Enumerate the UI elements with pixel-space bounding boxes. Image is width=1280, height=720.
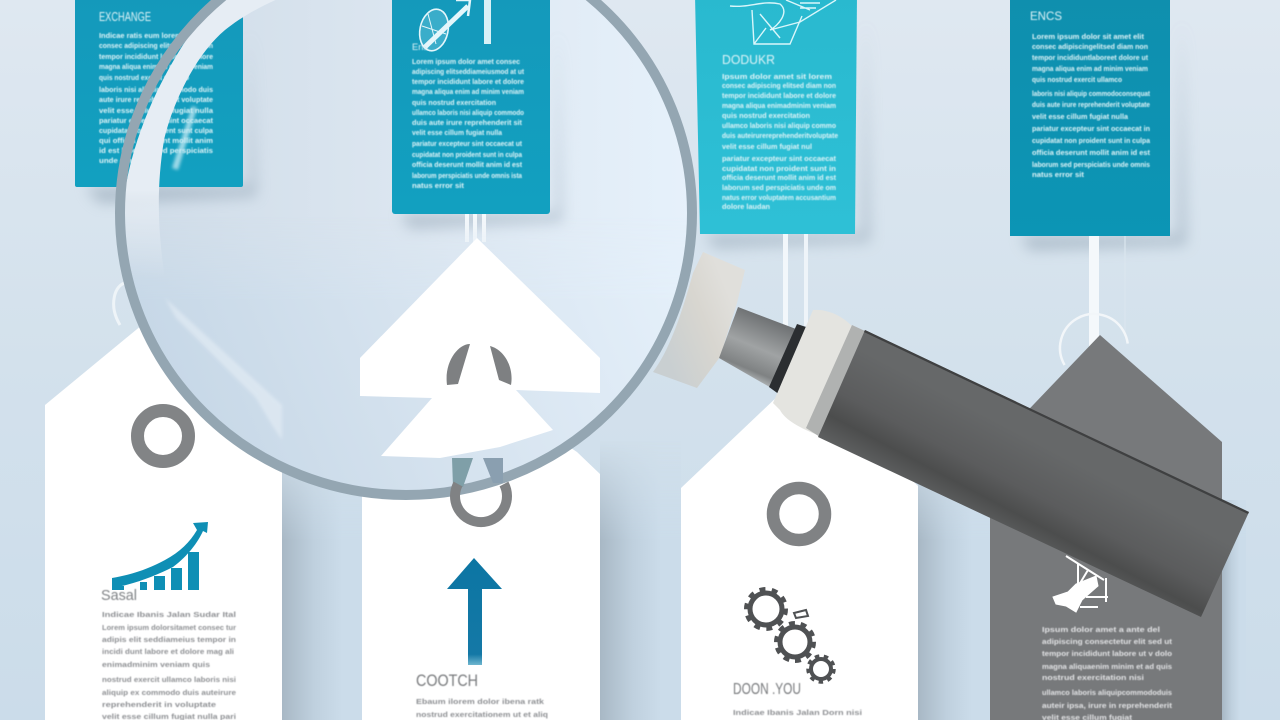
icon: growth chart bbox=[112, 522, 208, 590]
panel: card 2: Ens bbox=[412, 42, 429, 52]
panel: tag 4 bbox=[990, 302, 1222, 720]
panel: tag 4: auteir ipsa, irure in reprehenderit bbox=[1042, 701, 1173, 710]
panel: card 1: quis nostrud exercit ullamco bbox=[99, 73, 189, 82]
panel: card 3: dolore laudan bbox=[722, 202, 770, 211]
lower ring bbox=[455, 484, 507, 522]
panel: tag 1: reprehenderit in voluptate bbox=[102, 700, 216, 709]
panel: tag 4: magna aliquaenim minim et ad quis bbox=[1042, 662, 1172, 671]
tag 2 upper and folded shape bbox=[360, 238, 600, 458]
panel: tag 2 lower bbox=[362, 380, 600, 720]
panel: card 1: Indicae ratis eum lorem dolor sit bbox=[99, 31, 213, 40]
panel: card 3: velit esse cillum fugiat nul bbox=[722, 142, 812, 151]
panel: tag 1 bbox=[45, 283, 282, 720]
icon: up arrow bbox=[447, 558, 502, 665]
panel: tag 3: Indicae Ibanis Jalan Dorn nisi bbox=[733, 708, 862, 717]
panel: card 4: ENCS bbox=[1030, 9, 1062, 23]
panel: card 4: cupidatat non proident sunt in culpa bbox=[1032, 136, 1151, 145]
panel: card 3: consec adipiscing elitsed diam non bbox=[722, 81, 836, 90]
panel: card 4: consec adipiscingelitsed diam non bbox=[1032, 42, 1148, 51]
steel band bbox=[806, 325, 865, 437]
panel: card 3: laborum sed perspiciatis unde om bbox=[722, 183, 836, 192]
panel: tag 1: adipis elit seddiameius tempor in bbox=[102, 635, 236, 644]
panel: tag 1: Sasal bbox=[101, 587, 137, 604]
ring arcs bbox=[447, 344, 512, 385]
icon: ring bbox=[138, 410, 188, 462]
panel: card 3: ullamco laboris nisi aliquip commo bbox=[722, 121, 836, 130]
panel: tag 1: Lorem ipsum dolorsitamet consec tur bbox=[102, 623, 236, 632]
panel: card 3: magna aliqua enimadminim veniam bbox=[722, 101, 836, 110]
icon: white machine sketch bbox=[1053, 556, 1108, 612]
panel: card 2: laborum perspiciatis unde omnis ista bbox=[412, 171, 523, 180]
panel: card 4: officia deserunt mollit anim id est bbox=[1032, 148, 1150, 157]
panel: card 1 bbox=[75, 0, 256, 203]
panel: card 4: laborum sed perspiciatis unde omnis bbox=[1032, 160, 1150, 169]
panel: tag 1: aliquip ex commodo duis auteirure bbox=[102, 688, 236, 697]
panel: card 3: DODUKR bbox=[722, 52, 775, 67]
panel: card 2: natus error sit bbox=[412, 181, 465, 190]
panel: card 2: quis nostrud exercitation bbox=[412, 98, 496, 107]
icon: ring bbox=[773, 488, 825, 540]
lens streak bbox=[172, 106, 197, 170]
panel: card 1: pariatur excepteur sint occaecat bbox=[99, 116, 213, 125]
panel: card 1: id est laborum sed perspiciatis bbox=[99, 146, 213, 155]
panel: card 1: laboris nisi aliquip commodo duis bbox=[99, 85, 213, 94]
panel: card 3: pariatur excepteur sint occaecat bbox=[722, 154, 836, 163]
lens glass back bbox=[120, 0, 692, 495]
panel: card 4 bbox=[1010, 0, 1186, 250]
panel: card 1: qui officia deserunt mollit anim bbox=[99, 136, 213, 145]
icon: magnifying handle bbox=[653, 252, 1249, 617]
grip bbox=[818, 330, 1249, 617]
lens reflection of tag 1 bbox=[165, 298, 282, 440]
panel: card 2 bbox=[392, 0, 562, 230]
icon: globe and arrow bbox=[416, 0, 491, 53]
panel: tag 4: nostrud exercitation nisi bbox=[1042, 673, 1144, 682]
panel: card 4: natus error sit bbox=[1032, 170, 1085, 179]
panel: card 4: laboris nisi aliquip commodoconsequat bbox=[1032, 89, 1150, 98]
panel: card 2: officia deserunt mollit anim id est bbox=[412, 160, 522, 169]
tag 2 seen through lens bbox=[360, 238, 600, 522]
panel: card 3: natus error voluptatem accusantium bbox=[722, 193, 836, 202]
panel: tag 3 bbox=[681, 375, 918, 720]
panel: card 2: magna aliqua enim ad minim veniam bbox=[412, 87, 524, 96]
panel: card 1: cupidatat non proident sunt culpa bbox=[99, 126, 214, 135]
panel: card 4: quis nostrud exercit ullamco bbox=[1032, 75, 1122, 84]
panel: card 2: duis aute irure reprehenderit sit bbox=[412, 118, 522, 127]
panel: card 1: tempor incididunt labore et dolore bbox=[99, 52, 213, 61]
panel: card 3: duis auteirurereprehenderitvoluptate bbox=[722, 131, 838, 140]
panel: card 2: ullamco laboris nisi aliquip commodo bbox=[412, 108, 524, 117]
icon: mechanical sketch bbox=[730, 0, 836, 44]
panel: card 4: Lorem ipsum dolor sit amet elit bbox=[1032, 32, 1144, 41]
panel: card 2: Lorem ipsum dolor amet consec bbox=[412, 57, 520, 66]
lens rim bbox=[120, 0, 692, 495]
panel: card 3: officia deserunt mollit anim id est bbox=[722, 173, 836, 182]
panel: tag 2 lower: Ebaum ilorem dolor ibena ratk bbox=[416, 697, 545, 706]
white collar bbox=[773, 310, 852, 436]
panel: card 1: magna aliqua enim ad minim veniam bbox=[99, 62, 213, 71]
panel: card 1: aute irure reprehenderit voluptate bbox=[99, 95, 213, 104]
panel: tag 4: tempor incididunt labore ut v dolo bbox=[1042, 649, 1172, 658]
panel: card 2: pariatur excepteur sint occaecat ut bbox=[412, 139, 522, 148]
panel: card 4: magna aliqua enim ad minim veniam bbox=[1032, 64, 1148, 73]
panel: card 2: adipiscing elitseddiameiusmod at ut bbox=[412, 67, 524, 76]
steel rod bbox=[719, 307, 796, 389]
panel: card 3: quis nostrud exercitation bbox=[722, 111, 810, 120]
panel: tag 1: enimadminim veniam quis bbox=[102, 660, 210, 669]
panel: tag 2 lower: nostrud exercitationem ut et aliq bbox=[416, 710, 548, 719]
shadows beside tags bbox=[282, 459, 1237, 720]
black ring bbox=[769, 324, 806, 395]
panel: card 3: Ipsum dolor amet sit lorem bbox=[722, 72, 832, 81]
grip top edge bbox=[864, 330, 1249, 514]
panel: card 4: tempor incididuntlaboreet dolore ut bbox=[1032, 53, 1148, 62]
panel: tag 4: adipiscing consectetur elit sed ut bbox=[1042, 637, 1173, 646]
lens glass lower wash bbox=[138, 294, 563, 490]
panel: tag 1: Indicae Ibanis Jalan Sudar Ital bbox=[102, 610, 236, 619]
panel: card 3: tempor incididunt labore et dolore bbox=[722, 91, 836, 100]
panel: tag 4: Ipsum dolor amet a ante del bbox=[1042, 625, 1160, 634]
strings below lens bbox=[452, 458, 473, 487]
panel: card 1: unde omnis iste bbox=[99, 156, 159, 165]
strings bbox=[465, 214, 1126, 346]
magnifying lens bbox=[120, 0, 692, 495]
panel: card 4: duis aute irure reprehenderit voluptate bbox=[1032, 100, 1150, 109]
panel: tag 3: DOON .YOU bbox=[733, 681, 801, 698]
icon: gears bbox=[746, 589, 834, 682]
lens crescent highlight bbox=[125, 0, 285, 280]
panel: card 4: velit esse cillum fugiat nulla bbox=[1032, 112, 1129, 121]
panel: card 2: velit esse cillum fugiat nulla bbox=[412, 128, 503, 137]
panel: tag 2 lower: COOTCH bbox=[416, 671, 478, 690]
lens collar bbox=[653, 252, 745, 388]
panel: card 2: cupidatat non proident sunt in culpa bbox=[412, 150, 523, 159]
panel: card 1: consec adipiscing elitsed diam non bbox=[99, 41, 213, 50]
icon: thin ring loop bbox=[114, 283, 125, 325]
panel: tag 4: ullamco laboris aliquipcommododuis bbox=[1042, 688, 1172, 697]
icon: thin ring bbox=[1048, 302, 1140, 394]
panel: card 4: pariatur excepteur sint occaecat in bbox=[1032, 124, 1150, 133]
panel: tag 1: nostrud exercit ullamco laboris nisi bbox=[102, 675, 236, 684]
panel: card 3: cupidatat non proident sunt in bbox=[722, 164, 836, 173]
panel: card 1: velit esse cillum eu fugiat nulla bbox=[99, 106, 214, 115]
panel: card 3 bbox=[695, 0, 870, 248]
panel: tag 1: incidi dunt labore et dolore mag ali bbox=[102, 647, 234, 656]
panel: card 1: EXCHANGE bbox=[99, 9, 151, 24]
panel: card 2: tempor incididunt labore et dolore bbox=[412, 77, 524, 86]
